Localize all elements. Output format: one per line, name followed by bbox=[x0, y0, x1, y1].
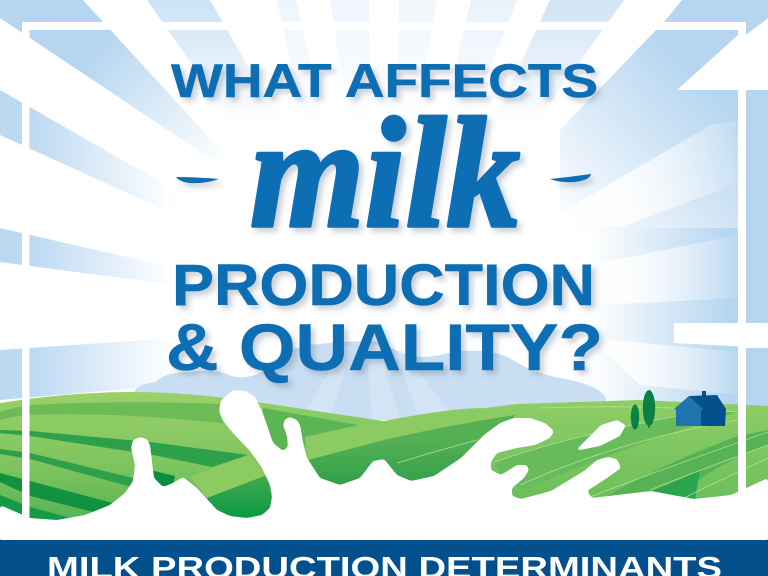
icon: farmhouse bbox=[674, 391, 726, 426]
heading line: what affects: WHAT AFFECTS bbox=[171, 54, 598, 107]
clouds and distant mountain bbox=[134, 341, 606, 420]
milk splash bbox=[0, 390, 768, 541]
banner bbox=[0, 540, 768, 576]
icon: trees bbox=[631, 390, 655, 430]
heading line: and quality: & QUALITY? bbox=[166, 310, 603, 384]
white cutout above the farm bbox=[674, 323, 768, 348]
script word: milk: milk bbox=[250, 86, 520, 261]
left dash bbox=[176, 177, 219, 183]
sun rays background bbox=[0, 0, 768, 408]
heading line: production: PRODUCTION bbox=[172, 253, 595, 318]
right dash bbox=[550, 174, 591, 182]
mid and right hill base bbox=[263, 400, 768, 540]
title bbox=[166, 54, 603, 384]
green hills bbox=[0, 385, 768, 540]
